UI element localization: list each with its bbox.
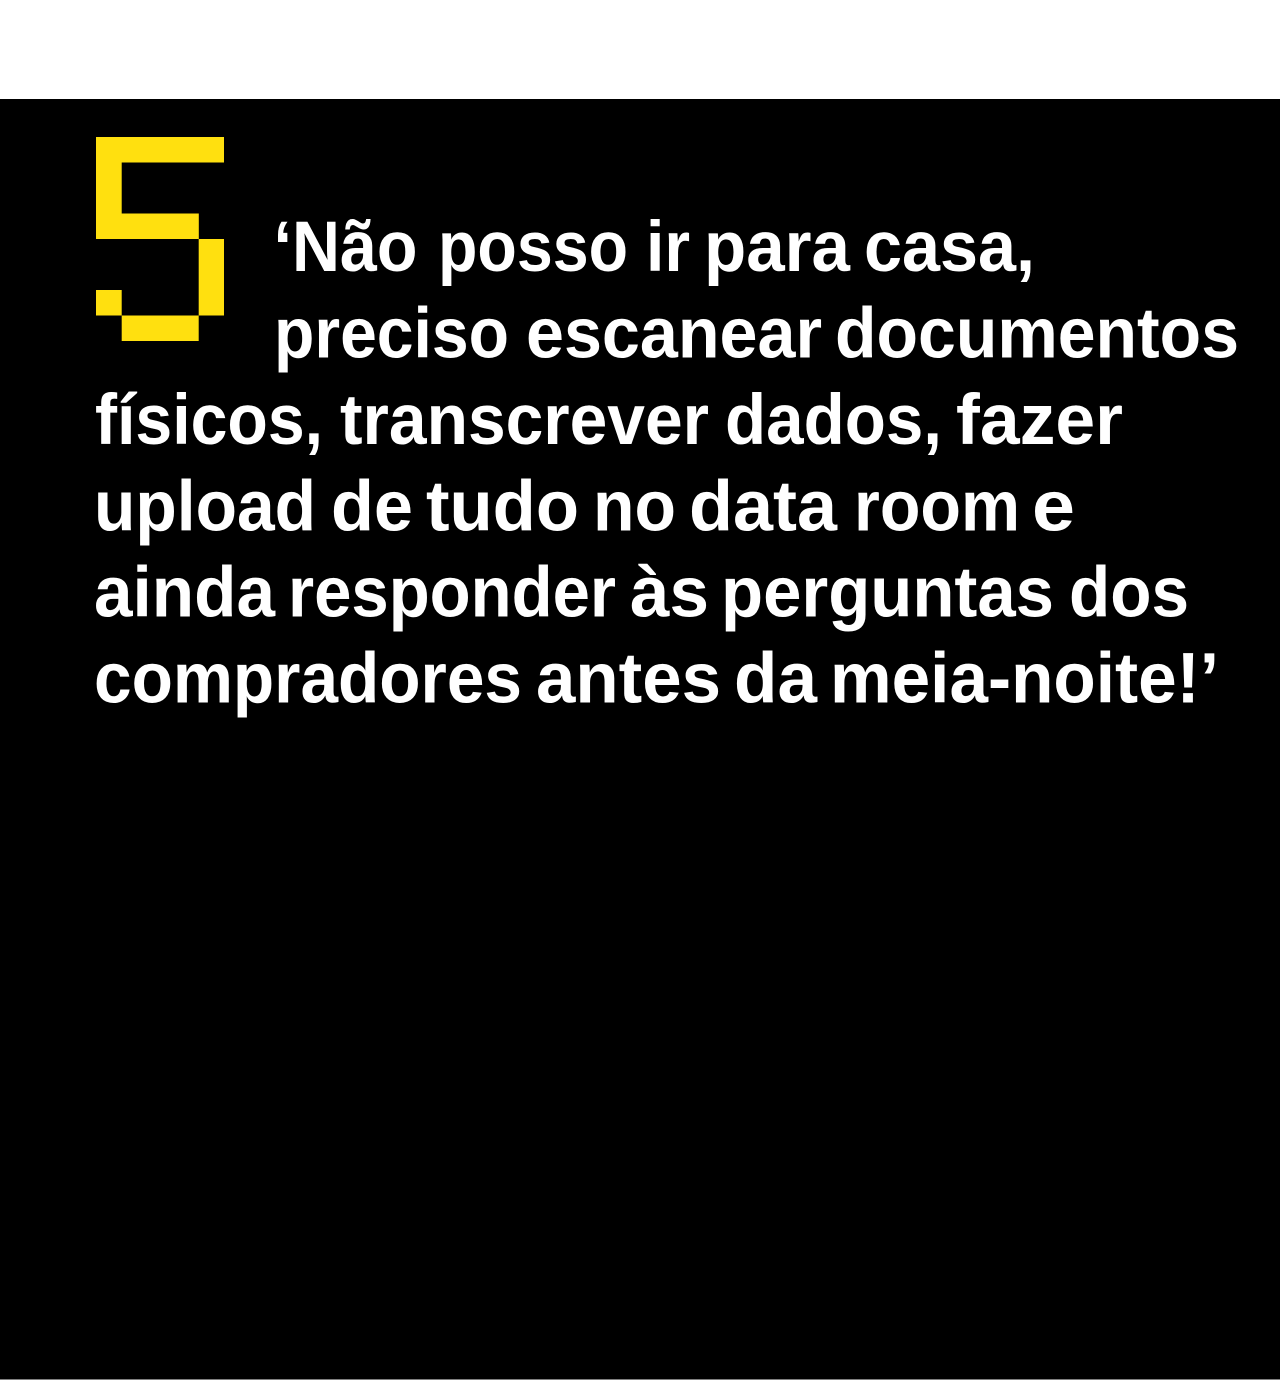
quote text: às <box>630 554 709 632</box>
quote text: para <box>704 208 850 287</box>
quote text: ainda <box>94 554 275 632</box>
quote text: dados, <box>725 381 942 460</box>
quote text: compradores <box>94 640 522 718</box>
icon: pixel numeral 5 <box>96 137 224 341</box>
quote text: posso <box>438 208 628 287</box>
quote text: dos <box>1069 554 1189 632</box>
quote text: da <box>734 640 818 718</box>
quote text: perguntas <box>721 554 1054 632</box>
quote text: upload <box>94 468 316 546</box>
quote text: data <box>689 468 838 546</box>
quote text <box>94 208 1239 718</box>
quote text: escanear <box>526 294 822 374</box>
quote text: preciso <box>274 294 509 374</box>
quote text: e <box>1032 468 1075 546</box>
quote text: documentos <box>835 294 1239 374</box>
quote text: transcrever <box>340 381 709 460</box>
quote text: tudo <box>426 468 579 546</box>
quote text: responder <box>288 554 616 632</box>
quote text: no <box>593 468 676 546</box>
quote text: fazer <box>956 381 1123 460</box>
quote text: antes <box>536 640 721 718</box>
quote text: casa, <box>864 208 1035 287</box>
quote text: de <box>331 468 413 546</box>
quote text: ir <box>646 208 690 287</box>
quote text: ‘Não <box>274 208 418 287</box>
quote text: meia-noite!’ <box>830 640 1219 718</box>
quote text: físicos, <box>95 381 323 460</box>
quote text: room <box>854 468 1020 546</box>
